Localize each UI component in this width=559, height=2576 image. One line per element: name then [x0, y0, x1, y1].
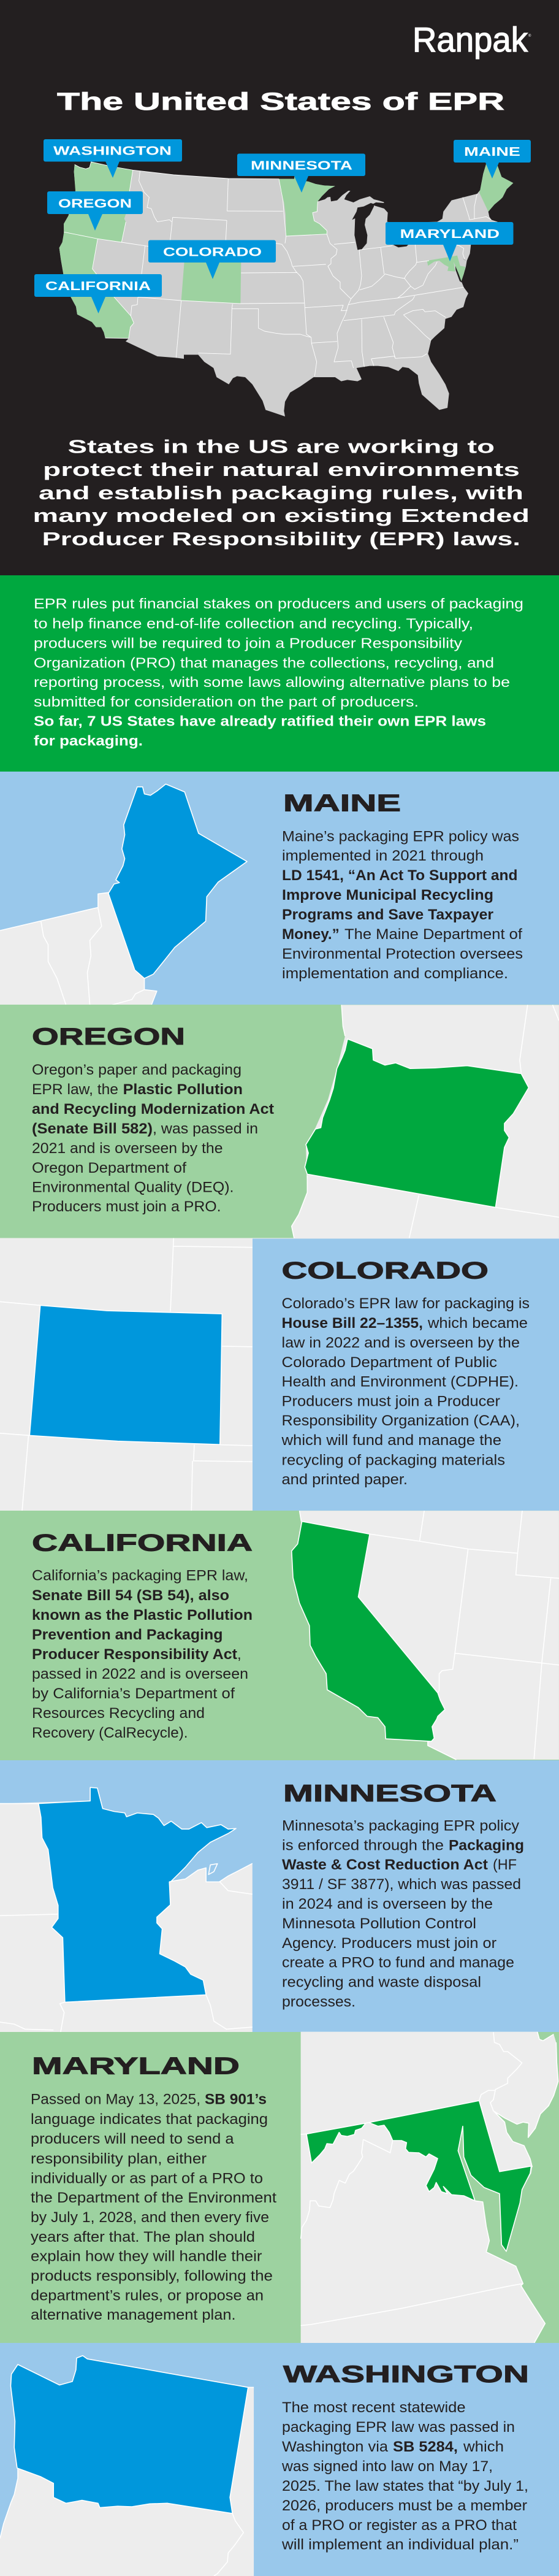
body text: Colorado: Colorado Department of Public — [282, 1354, 497, 1371]
body text: Maryland: responsibility plan, either — [31, 2150, 207, 2167]
callout: Minnesota: MINNESOTA — [251, 159, 352, 173]
body text: Washington: 2025. The law states that “by July 1, — [282, 2478, 528, 2494]
body text: Maryland: the Department of the Environment — [31, 2190, 276, 2206]
panel: Maryland — [0, 2032, 559, 2343]
body text: Colorado: recycling of packaging materials — [282, 1452, 505, 1468]
intro paragraph: producers will be required to join a Producer Responsibility — [34, 635, 463, 651]
body text: Minnesota: Agency. Producers must join or — [282, 1935, 496, 1952]
body text: California: passed in 2022 and is overseen — [32, 1666, 248, 1682]
body text: California: Producer Responsibility Act — [32, 1646, 237, 1663]
body text: California: California’s packaging EPR law, — [32, 1568, 248, 1584]
headline text block: Producer Responsibility (EPR) laws. — [42, 528, 520, 550]
map: Minnesota — [0, 1787, 253, 2032]
body text: Maine: Programs and Save Taxpayer — [282, 907, 493, 923]
body text: Minnesota: Minnesota Pollution Control — [282, 1915, 476, 1932]
panel: dark header — [0, 0, 559, 575]
heading: California: CALIFORNIA — [32, 1530, 253, 1557]
body text: Washington: was signed into law on May 17, — [281, 2458, 493, 2475]
body text: Maryland: department’s rules, or propose an — [31, 2288, 264, 2304]
body text: Washington: packaging EPR law was passed in — [282, 2419, 515, 2436]
body text: Colorado: which became — [427, 1315, 528, 1332]
body text: Minnesota — [282, 1817, 524, 2011]
body text: Colorado — [281, 1295, 530, 1488]
headline text block: States in the US are working to — [67, 435, 495, 458]
body text: Maryland: individually or as part of a PRO to — [31, 2170, 263, 2187]
heading: Washington: WASHINGTON — [283, 2361, 529, 2388]
body text: California: Resources Recycling and — [32, 1705, 205, 1722]
callout: Washington: WASHINGTON — [53, 144, 172, 158]
body text: Oregon: 2021 and is overseen by the — [32, 1140, 223, 1157]
intro paragraph: Organization (PRO) that manages the collections, recycling, and — [34, 655, 494, 671]
body text: California — [32, 1568, 253, 1741]
heading: Minnesota: MINNESOTA — [283, 1781, 496, 1807]
body text: Maryland: Passed on May 13, 2025, — [31, 2091, 200, 2107]
body text: Minnesota: create a PRO to fund and manage — [282, 1955, 514, 1971]
body text: Maryland: alternative management plan. — [31, 2307, 235, 2323]
panel: Minnesota — [0, 1760, 559, 2032]
body text: Oregon — [32, 1062, 274, 1215]
body text: Washington: SB 5284, — [393, 2439, 458, 2455]
body text: Maryland: by July 1, 2028, and then every five — [31, 2209, 269, 2226]
panel: Maine — [0, 772, 559, 1005]
body text: Washington — [281, 2399, 528, 2553]
body text: Washington: which — [463, 2439, 504, 2455]
body text: California: known as the Plastic Pollution — [32, 1607, 253, 1623]
map: Oregon — [292, 1005, 559, 1238]
headline text block — [33, 435, 530, 550]
panel: California — [0, 1511, 559, 1760]
callout: Minnesota — [237, 153, 365, 193]
body text: Oregon: Plastic Pollution — [123, 1081, 243, 1098]
body text: Minnesota: in 2024 and is overseen by the — [282, 1896, 493, 1912]
heading: Colorado: COLORADO — [282, 1258, 489, 1284]
callout: Maine: MAINE — [464, 145, 520, 159]
map: Maine — [0, 784, 247, 1005]
body text: Maryland: language indicates that packaging — [31, 2111, 268, 2128]
heading: Oregon: OREGON — [32, 1024, 185, 1050]
body text: Maine — [282, 828, 523, 982]
body text: Maine: Money.” — [282, 926, 340, 943]
body text: Oregon: Environmental Quality (DEQ). — [32, 1179, 234, 1196]
callout: California — [34, 274, 162, 313]
map: California — [292, 1511, 559, 1760]
intro paragraph: EPR rules put financial stakes on producers and users of packaging — [34, 596, 523, 611]
panel: Colorado — [0, 1238, 559, 1511]
body text: Colorado: Responsibility Organization (CAA), — [282, 1413, 520, 1429]
body text: Colorado: Producers must join a Producer — [282, 1393, 500, 1410]
body text: Colorado: Colorado’s EPR law for packaging is — [282, 1295, 530, 1312]
body text: Maryland: explain how they will handle their — [31, 2248, 262, 2265]
intro paragraph: So far, 7 US States have already ratified their own EPR laws — [34, 713, 486, 729]
body text: California: by California’s Department of — [32, 1685, 235, 1702]
body text: Oregon: EPR law, the — [32, 1081, 118, 1098]
body text: California: Recovery (CalRecycle). — [32, 1725, 188, 1741]
body text: Washington: of a PRO or register as a PRO that — [282, 2517, 517, 2534]
body text: Maryland: years after that. The plan should — [31, 2229, 255, 2245]
body text: Colorado: House Bill 22–1355, — [282, 1315, 423, 1332]
headline text block: protect their natural environments — [43, 459, 520, 480]
panel: EPR explanation — [0, 575, 559, 772]
body text: Washington: 2026, producers must be a member — [282, 2497, 527, 2514]
callout: Colorado — [148, 240, 276, 279]
body text: Minnesota: (HF — [493, 1857, 517, 1873]
body text: Minnesota: processes. — [282, 1994, 356, 2011]
intro paragraph: for packaging. — [34, 733, 143, 749]
body text: Colorado: Health and Environment (CDPHE). — [282, 1374, 519, 1390]
intro paragraph: to help finance end-of-life collection and recycling. Typically, — [34, 615, 473, 631]
body text: Colorado: which will fund and manage the — [281, 1432, 501, 1449]
logo: Ranpak: ® — [528, 34, 531, 38]
panel: Washington — [0, 2343, 559, 2576]
body text: Oregon: , was passed in — [153, 1121, 258, 1137]
body text: Oregon: (Senate Bill 582) — [32, 1121, 153, 1137]
callout: Washington — [44, 139, 182, 178]
body text: Minnesota: Packaging — [449, 1837, 524, 1853]
intro paragraph — [34, 596, 523, 749]
body text: Maryland — [31, 2091, 276, 2323]
body text: Minnesota: Minnesota’s packaging EPR policy — [282, 1817, 519, 1834]
body text: Oregon: Oregon Department of — [32, 1160, 186, 1176]
headline text block: and establish packaging rules, with — [39, 482, 523, 504]
callout: Maryland — [386, 222, 513, 261]
body text: Maine: implemented in 2021 through — [282, 848, 484, 864]
panel: Oregon — [0, 1005, 559, 1238]
body text: Maine: Environmental Protection oversees — [282, 946, 523, 962]
heading: Maine: MAINE — [283, 790, 401, 816]
body text: Washington: Washington via — [282, 2439, 389, 2455]
body text: Washington: will implement an individual plan.” — [281, 2537, 519, 2553]
body text: Maryland: products responsibly, following the — [31, 2268, 273, 2285]
body text: Maryland: SB 901’s — [205, 2091, 267, 2107]
body text: Oregon: Oregon’s paper and packaging — [32, 1062, 241, 1078]
body text: Colorado: law in 2022 and is overseen by the — [282, 1335, 520, 1351]
body text: Maine: Maine’s packaging EPR policy was — [282, 828, 519, 845]
body text: Minnesota: Waste & Cost Reduction Act — [282, 1857, 488, 1873]
headline text block: many modeled on existing Extended — [33, 505, 530, 526]
body text: Maryland: producers will need to send a — [31, 2131, 234, 2147]
body text: Oregon: and Recycling Modernization Act — [32, 1101, 274, 1117]
body text: Maine: Improve Municipal Recycling — [282, 887, 493, 903]
callout: Colorado: COLORADO — [163, 245, 262, 259]
callout: Maryland: MARYLAND — [400, 227, 500, 241]
body text: Maine: implementation and compliance. — [282, 965, 508, 982]
callout: Oregon — [47, 191, 143, 231]
body text: California: Prevention and Packaging — [32, 1627, 223, 1643]
body text: Colorado: and printed paper. — [282, 1471, 408, 1488]
body text: California: , — [237, 1646, 241, 1663]
map: Colorado — [0, 1238, 253, 1511]
body text: Maine: The Maine Department of — [344, 926, 522, 943]
body text: Oregon: Producers must join a PRO. — [32, 1198, 221, 1215]
body text: Washington: The most recent statewide — [282, 2399, 466, 2416]
map: United States — [34, 139, 531, 416]
callout: Oregon: OREGON — [58, 196, 132, 210]
body text: Minnesota: is enforced through the — [282, 1837, 444, 1853]
intro paragraph: submitted for consideration on the part of producers. — [34, 694, 419, 710]
map: Maryland — [301, 2032, 558, 2343]
heading: Maryland: MARYLAND — [32, 2053, 240, 2080]
logo: Ranpak: Ranpak — [413, 20, 528, 59]
body text: Maine: LD 1541, “An Act To Support and — [282, 867, 517, 884]
body text: California: Senate Bill 54 (SB 54), also — [32, 1587, 229, 1604]
title: The United States of EPR — [57, 88, 504, 115]
intro paragraph: reporting process, with some laws allowing alternative plans to be — [34, 674, 510, 690]
map: Washington — [0, 2356, 254, 2576]
callout: Maine — [454, 140, 531, 178]
callout: California: CALIFORNIA — [45, 279, 151, 293]
body text: Minnesota: recycling and waste disposal — [282, 1974, 481, 1991]
body text: Minnesota: 3911 / SF 3877), which was passed — [282, 1876, 521, 1893]
